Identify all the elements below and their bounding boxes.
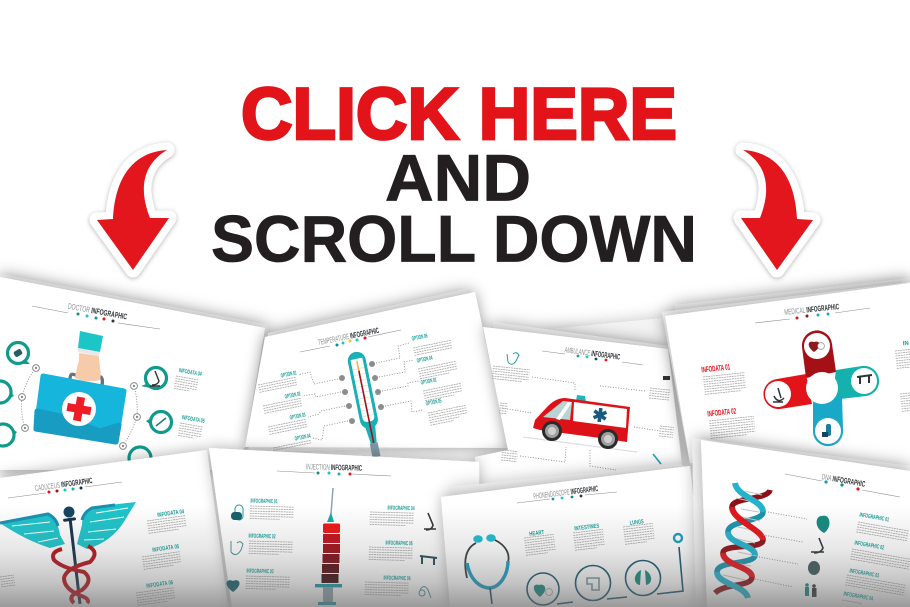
ambulance vehicle	[523, 395, 637, 452]
label: infodata 01	[701, 362, 747, 394]
label: infodata 05	[142, 544, 181, 569]
panel: doctor infographic	[0, 274, 268, 470]
panel: caduceus infographic	[0, 450, 228, 607]
option labels: OPTION 04	[294, 433, 312, 443]
bottom fade overlay	[0, 505, 910, 607]
icon rings around case	[0, 342, 172, 469]
label: infodata 06: INFODATA 06	[146, 580, 174, 590]
label: infodata 02: INFODATA 02	[707, 406, 737, 419]
label: infodata 04: INFODATA 04	[157, 509, 185, 519]
label: infodata 01: INFODATA 01	[701, 362, 731, 375]
label: heart	[524, 530, 556, 555]
left labels: INFOGRAPHIC 02	[248, 534, 276, 540]
phonendoscope heading: PHONENDOSCOPE INFOGRAPHIC	[533, 484, 599, 501]
label: infographic 02: INFOGRAPHIC 02	[854, 540, 885, 552]
right labels: INFOGRAPHIC 04	[387, 506, 415, 512]
option labels: OPTION 02	[420, 377, 438, 387]
right text fragments	[895, 341, 910, 411]
medical cross	[763, 330, 879, 446]
label: infodata 04: INFODATA 04	[178, 368, 202, 378]
label: lungs: LUNGS	[630, 519, 644, 527]
left labels: INFOGRAPHIC 01	[250, 499, 278, 505]
injection heading: INJECTION INFOGRAPHIC	[306, 462, 362, 473]
title: scroll down: SCROLL DOWN	[211, 202, 697, 276]
label: infographic 04: INFOGRAPHIC 04	[843, 591, 874, 603]
left text fragment	[0, 575, 15, 587]
option labels	[258, 333, 469, 450]
label: infodata 05: INFODATA 05	[152, 544, 180, 554]
dna helix	[715, 483, 770, 598]
option labels: OPTION 04	[416, 355, 434, 365]
icon: hand holding medical case	[36, 331, 124, 442]
organ icons	[805, 516, 830, 597]
label: infodata 04	[147, 509, 187, 533]
right labels: INFOGRAPHIC 06	[383, 576, 411, 582]
label: lungs	[623, 519, 655, 544]
option labels: OPTION 05	[425, 398, 443, 408]
right labels: INFOGRAPHIC 05	[385, 541, 413, 547]
left labels	[246, 499, 294, 590]
connectors and nodes	[19, 365, 140, 449]
panel: phonendoscope infographic	[441, 464, 705, 607]
label: infodata 06	[136, 580, 175, 605]
right text fragments: IN	[903, 341, 909, 347]
label: infographic 01: INFOGRAPHIC 01	[859, 512, 890, 524]
node circles	[339, 361, 384, 424]
caduceus heading: CADUCEUS INFOGRAPHIC	[34, 476, 93, 493]
dotted connectors and text	[492, 366, 674, 470]
label: infodata 05: INFODATA 05	[181, 415, 205, 425]
thermometer	[346, 350, 385, 459]
panel: medical infographic	[662, 278, 910, 470]
option labels: OPTION 01	[280, 370, 298, 380]
title: and: AND	[385, 140, 531, 214]
option labels: OPTION 06	[411, 333, 429, 343]
panel: dna infographic	[692, 438, 910, 607]
label: infographic 03: INFOGRAPHIC 03	[849, 568, 880, 580]
label: infographic 01	[856, 512, 909, 541]
label: infodata 02	[707, 406, 756, 438]
option labels: OPTION 02	[284, 391, 302, 401]
title: click here: CLICK HERE	[241, 74, 677, 155]
label: heart: HEART	[529, 530, 545, 538]
dotted connectors	[298, 343, 423, 440]
arrow: left	[97, 150, 169, 270]
icon: stethoscope small	[507, 353, 519, 364]
label: infographic 04	[842, 591, 874, 603]
temperature heading: TEMPERATURE INFOGRAPHIC	[317, 326, 380, 347]
left labels: INFOGRAPHIC 03	[246, 569, 274, 575]
label: infographic 02	[850, 540, 910, 569]
side icons	[226, 505, 437, 598]
ambulance heading: AMBULANCE INFOGRAPHIC	[564, 345, 621, 362]
panel: temperature infographic	[245, 289, 510, 459]
label: intestines	[573, 524, 605, 550]
dotted connectors	[755, 512, 807, 587]
panel: ambulance infographic	[475, 318, 682, 490]
dna heading: DNA INFOGRAPHIC	[821, 472, 866, 489]
option labels: OPTION 03	[289, 412, 307, 422]
syringe	[315, 488, 342, 605]
medical heading: MEDICAL INFOGRAPHIC	[784, 302, 840, 317]
panel: injection infographic	[209, 448, 480, 607]
arrow: right	[741, 150, 813, 270]
label: infographic 03	[845, 568, 906, 595]
doctor heading: DOCTOR INFOGRAPHIC	[67, 302, 128, 321]
label: intestines: INTESTINES	[574, 524, 600, 533]
small icons in rings	[13, 348, 166, 426]
label: infodata 04	[174, 368, 202, 392]
stethoscope	[465, 534, 509, 604]
caduceus symbol	[0, 502, 136, 604]
organ rings and line	[527, 534, 683, 605]
right labels	[365, 506, 415, 596]
label: infodata 05	[178, 415, 205, 439]
